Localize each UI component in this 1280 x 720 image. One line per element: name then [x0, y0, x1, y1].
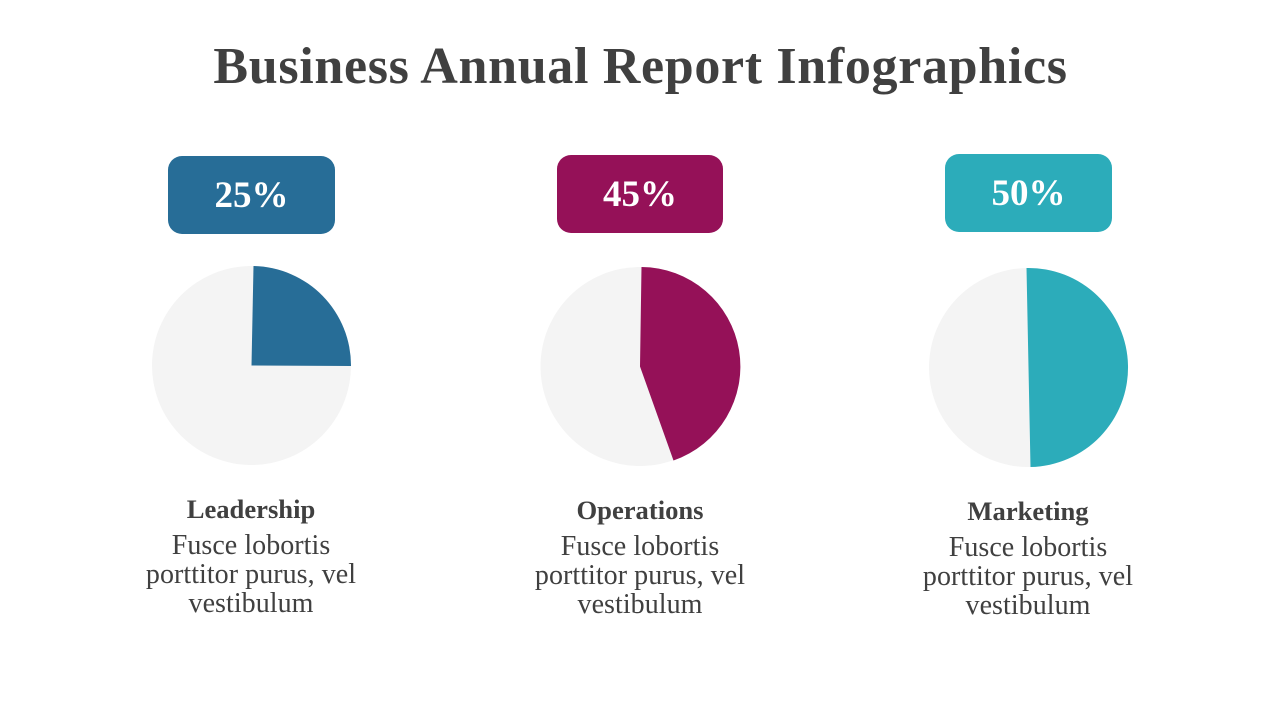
description: operations	[535, 531, 745, 620]
description: marketing	[923, 532, 1133, 621]
description: marketing: porttitor purus, vel	[923, 561, 1133, 592]
description: leadership: porttitor purus, vel	[146, 559, 356, 590]
badge: 25%	[168, 156, 335, 234]
text block: marketing	[923, 496, 1133, 621]
badge: 45%	[557, 155, 723, 233]
title: Business Annual Report Infographics	[213, 38, 1068, 95]
description: operations: Fusce lobortis	[561, 531, 719, 562]
badge: 45%: 45%	[603, 174, 677, 215]
heading: operations: Operations	[576, 495, 704, 525]
text block: leadership	[146, 494, 356, 619]
description: operations: porttitor purus, vel	[535, 560, 745, 591]
pie: leadership 25%	[152, 266, 351, 465]
heading: marketing: Marketing	[967, 496, 1089, 526]
description: leadership	[146, 530, 356, 619]
description: leadership: vestibulum	[189, 588, 313, 619]
description: marketing: vestibulum	[966, 590, 1090, 621]
text block: operations	[535, 495, 745, 620]
badge: 50%: 50%	[992, 173, 1066, 214]
pie: operations 45%	[540, 267, 740, 466]
description: operations: vestibulum	[578, 589, 702, 620]
badge: 25%: 25%	[214, 175, 288, 216]
pie: marketing 50%	[929, 268, 1128, 467]
badge: 50%	[945, 154, 1112, 232]
description: leadership: Fusce lobortis	[172, 530, 330, 561]
description: marketing: Fusce lobortis	[949, 532, 1107, 563]
heading: leadership: Leadership	[187, 494, 315, 524]
